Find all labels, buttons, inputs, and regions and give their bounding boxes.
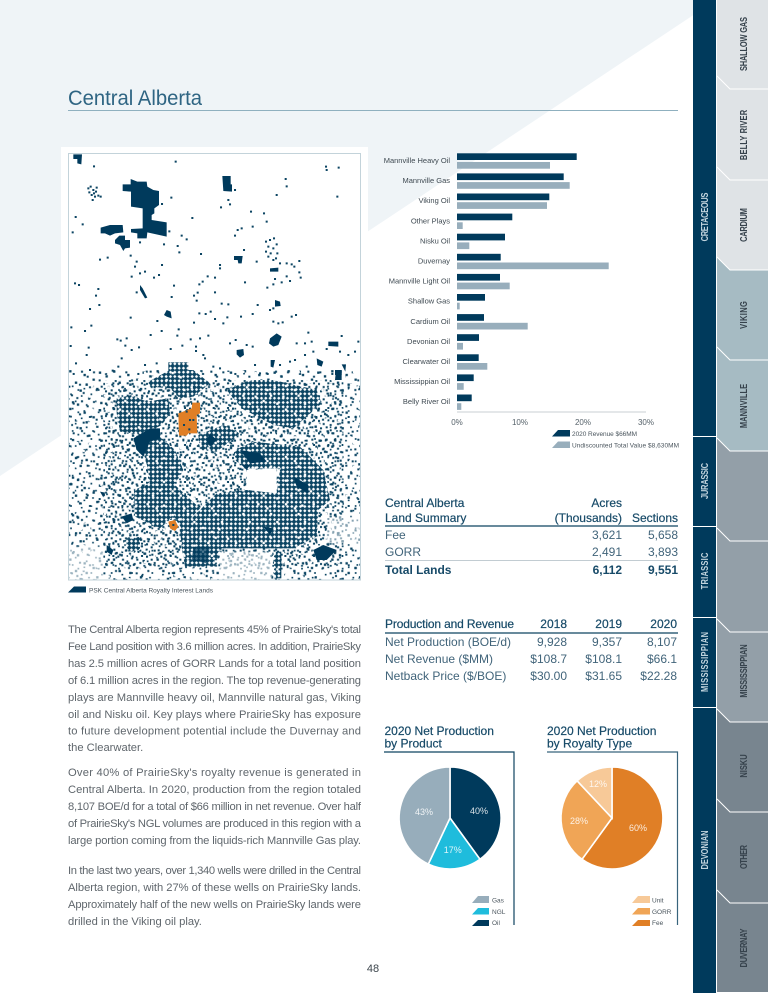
play labels: Viking Oil (418, 196, 450, 205)
play labels (384, 156, 450, 406)
page number: 48 (367, 963, 379, 975)
pie legend: royalty type: Unit (652, 898, 664, 904)
table: production and revenue: $66.1 (647, 652, 677, 666)
table: production and revenue: Net Production (BOE/d) (385, 635, 511, 649)
play labels: Shallow Gas (408, 297, 450, 306)
axis ticks (451, 418, 654, 427)
text block: body paragraphs: plays are Mannville heavy oil, Mannville natural gas, Viking (68, 692, 361, 704)
table: production and revenue: 2019 (595, 617, 622, 631)
bar chart: plays (384, 153, 679, 450)
table: production and revenue: 2020 (650, 617, 677, 631)
panel: production by product pie: 43% (415, 807, 433, 817)
pie legend: royalty type (632, 896, 672, 927)
text block: body paragraphs: Over 40% of PrairieSky's royalty revenue is generated in (68, 767, 361, 779)
axis ticks: 0% (451, 418, 463, 427)
solid parcels (100, 370, 342, 563)
chart legend: Undiscounted Total Value $8,630MM (572, 442, 679, 450)
formation tabs: VIKING (738, 301, 749, 329)
text block: body paragraphs: Fee Land position with 3.6 million acres. In addition, PrairieSky (68, 641, 361, 653)
axis ticks: 20% (575, 418, 591, 427)
table: land summary: Central Alberta (385, 496, 465, 510)
text block: body paragraphs: of 6.1 million acres in the region. The top revenue-generating (68, 675, 361, 687)
panel: production by royalty type pie: 2020 Net Production (547, 724, 656, 738)
table: production and revenue: Netback Price ($/BOE) (385, 669, 506, 683)
formation tabs: NISKU (738, 754, 749, 778)
chart legend: 2020 Revenue $66MM (572, 431, 637, 438)
formation tabs: BELLY RIVER (738, 109, 749, 160)
chart legend (552, 430, 679, 450)
period column: MISSISSIPPIAN (699, 632, 710, 692)
formation tabs: OTHER (738, 844, 749, 869)
panel: production by product pie: 2020 Net Production (384, 724, 494, 738)
map: southern lands (68, 370, 360, 580)
text block: body paragraphs: large portion coming from the liquids-rich Mannville Gas play. (68, 835, 361, 847)
text block: body paragraphs: to future development potential include the Duvernay and (68, 726, 361, 738)
table: land summary: 3,621 (592, 528, 622, 542)
table: production and revenue: $30.00 (530, 669, 567, 683)
table: land summary: 5,658 (648, 528, 678, 542)
table: production and revenue: 9,357 (592, 635, 622, 649)
play labels: Mannville Light Oil (389, 277, 450, 286)
panel: production by royalty type pie: 12% (589, 779, 607, 789)
panel: production by product pie (384, 724, 514, 927)
axis ticks: 30% (638, 418, 654, 427)
pie legend: product: NGL (492, 909, 506, 916)
table: production and revenue: $22.28 (640, 669, 677, 683)
text block: body paragraphs: 8,107 BOE/d for a total of $66 million in net revenue. Over half (68, 801, 362, 813)
table: land summary: (Thousands) (555, 511, 622, 525)
panel: production by product pie: 17% (444, 845, 462, 855)
text block: body paragraphs (68, 624, 362, 928)
pie legend: product: Gas (492, 898, 505, 904)
play labels: Mannville Gas (402, 176, 450, 185)
panel: production by royalty type pie: 28% (570, 816, 588, 826)
text block: body paragraphs: Approximately half of the new wells on PrairieSky lands were (68, 899, 361, 911)
pie legend: royalty type: Fee (652, 920, 664, 927)
play labels: Devonian Oil (407, 337, 450, 346)
bars: undiscounted total value (457, 162, 609, 410)
play labels: Duvernay (418, 256, 450, 266)
text block: body paragraphs: Alberta region, with 27% of these wells on PrairieSky lands. (68, 882, 361, 894)
text block: body paragraphs: In the last two years, over 1,340 wells were drilled in the Central (68, 865, 361, 877)
play labels: Mississippian Oil (394, 377, 450, 386)
table: land summary: Fee (385, 528, 406, 542)
panel: production by product pie: 40% (470, 806, 488, 816)
table: land summary: 9,551 (648, 563, 678, 577)
table: production and revenue: 2018 (540, 617, 567, 631)
formation tabs: MISSISSIPPIAN (738, 644, 749, 698)
panel: production by royalty type pie: by Royalty Type (547, 736, 632, 750)
play labels: Other Plays (411, 216, 450, 225)
dense hatched parcels (117, 370, 330, 578)
text block: body paragraphs: The Central Alberta region represents 45% of PrairieSky's total (68, 624, 361, 636)
text block: body paragraphs: oil and Nisku oil. Key plays where PrairieSky has exposure (68, 709, 361, 721)
formation tabs: MANNVILLE (738, 384, 749, 428)
text block: body paragraphs: Central Alberta. In 2020, production from the region totaled (68, 784, 361, 796)
background triangle (0, 0, 716, 476)
pie legend: royalty type: GORR (652, 909, 672, 916)
formation tabs: SHALLOW GAS (738, 17, 749, 71)
play labels: Belly River Oil (403, 397, 450, 406)
table: land summary: Acres (591, 496, 622, 510)
text block: body paragraphs: of PrairieSky's NGL volumes are produced in this region with a (68, 818, 362, 830)
map frame (68, 154, 360, 580)
play labels: Nisku Oil (420, 236, 450, 245)
text block: body paragraphs: the Clearwater. (68, 742, 143, 754)
table: production and revenue: $108.1 (585, 652, 622, 666)
period column: TRIASSIC (699, 552, 710, 589)
table: land summary: 3,893 (648, 545, 678, 559)
map legend: PSK Central Alberta Royalty Interest Lands (89, 588, 214, 594)
table: production and revenue: $108.7 (530, 652, 567, 666)
table: land summary: 2,491 (592, 545, 622, 559)
formation tabs (717, 0, 768, 992)
table: production and revenue: 9,928 (537, 635, 567, 649)
table: land summary: Total Lands (385, 563, 452, 577)
period column: JURASSIC (699, 462, 710, 499)
table: production and revenue: Production and Revenue (385, 617, 514, 631)
play labels: Clearwater Oil (402, 357, 450, 366)
panel: royalty interest lands map (61, 147, 368, 599)
pie legend: product: Oil (492, 920, 500, 927)
table: land summary: 6,112 (593, 563, 622, 577)
table: land summary: Land Summary (385, 511, 466, 525)
orange lands (168, 403, 200, 531)
text block: body paragraphs: drilled in the Viking oil play. (68, 916, 202, 928)
pie chart: royalty type (561, 767, 663, 869)
axis ticks: 10% (512, 418, 528, 427)
title: Central Alberta (68, 87, 202, 110)
formation tabs: CARDIUM (738, 208, 749, 242)
period column: DEVONIAN (699, 830, 710, 870)
pie chart: product (399, 767, 501, 869)
bars: 2020 revenue (457, 153, 577, 401)
text block: body paragraphs: has 2.5 million acres of GORR Lands for a total land position (68, 658, 361, 670)
table: land summary: Sections (632, 511, 678, 525)
pie legend: product (472, 896, 506, 927)
table: production and revenue: 8,107 (647, 635, 677, 649)
play labels: Mannville Heavy Oil (384, 156, 450, 165)
play labels: Cardium Oil (410, 317, 450, 326)
formation tabs: DUVERNAY (738, 928, 749, 968)
panel: geological sidebar (693, 0, 768, 993)
scattered parcels (68, 370, 360, 580)
table: production and revenue: $31.65 (585, 669, 622, 683)
table: production and revenue: Net Revenue ($MM) (385, 652, 493, 666)
table: land summary: GORR (385, 545, 421, 559)
panel: production by product pie: by Product (384, 736, 443, 750)
panel: production by royalty type pie (547, 724, 678, 927)
period column (693, 0, 716, 993)
table: land summary (385, 496, 678, 577)
period column: CRETACEOUS (699, 193, 710, 241)
map: northern lands (71, 154, 358, 376)
table: production and revenue (385, 617, 678, 683)
panel: production by royalty type pie: 60% (629, 823, 647, 833)
